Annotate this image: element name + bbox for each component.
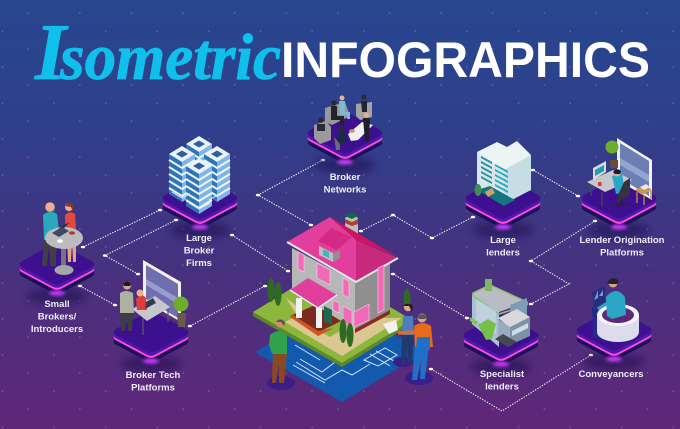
trees bbox=[268, 278, 410, 347]
panel: conveyancers bbox=[577, 278, 651, 380]
central illustration: house on blueprint bbox=[253, 212, 433, 402]
icon: mid-rise buildings bbox=[470, 279, 530, 347]
panel: broker networks bbox=[308, 94, 382, 196]
platform bbox=[114, 312, 188, 373]
platform bbox=[466, 178, 540, 239]
icon: server racks bbox=[169, 136, 230, 214]
label: Broker bbox=[184, 246, 215, 256]
icon: two people at table bbox=[42, 202, 83, 275]
platform bbox=[163, 178, 237, 239]
icon: person at cylinder desk bbox=[592, 278, 639, 342]
platform bbox=[308, 112, 382, 174]
label: Brokers/ bbox=[38, 312, 77, 322]
platform bbox=[20, 244, 94, 305]
person: woman with plan bbox=[383, 303, 414, 367]
title bbox=[34, 9, 650, 97]
label: Lender Origination bbox=[580, 235, 665, 246]
panel: lender origination platforms bbox=[580, 138, 665, 258]
icon: meeting room bbox=[314, 94, 373, 150]
icon: lender workstation bbox=[587, 138, 652, 207]
panel: small brokers bbox=[20, 202, 94, 335]
label: lenders bbox=[485, 382, 519, 392]
platform bbox=[577, 310, 651, 371]
title word: INFOGRAPHICS: INFOGRAPHICS bbox=[281, 32, 650, 88]
label: Firms bbox=[186, 258, 212, 269]
porch bbox=[290, 278, 341, 336]
panel: large broker firms bbox=[163, 136, 237, 269]
label: Small bbox=[44, 299, 70, 310]
panel: broker tech platforms bbox=[114, 260, 188, 394]
icon: office workstation bbox=[120, 260, 188, 335]
label: Specialist bbox=[480, 369, 525, 380]
dormer bbox=[318, 228, 352, 262]
title script word: Isometric: I bbox=[34, 9, 69, 97]
label: Introducers bbox=[31, 324, 83, 335]
platform bbox=[464, 314, 538, 376]
blueprint bbox=[255, 303, 425, 402]
label: Large bbox=[490, 235, 516, 246]
label: Platforms bbox=[131, 382, 175, 394]
chimney bbox=[345, 212, 358, 234]
platform bbox=[582, 178, 656, 239]
label: Conveyancers bbox=[579, 369, 643, 380]
panel: large lenders bbox=[466, 141, 540, 258]
person: man in overalls bbox=[398, 314, 433, 385]
label: Networks bbox=[324, 184, 366, 196]
windows bbox=[298, 252, 384, 327]
label: Broker bbox=[330, 172, 361, 183]
label: Broker Tech bbox=[126, 370, 181, 381]
house bbox=[287, 212, 398, 336]
land bbox=[253, 268, 412, 367]
roof bbox=[287, 217, 398, 282]
label: lenders bbox=[486, 248, 520, 258]
title script word: Isometric: sometric bbox=[59, 21, 281, 94]
label: Platforms bbox=[600, 248, 644, 258]
label: Large bbox=[186, 233, 212, 244]
icon: office tower bbox=[474, 141, 531, 206]
person: man in green bbox=[267, 318, 295, 390]
panel: specialist lenders bbox=[464, 279, 538, 392]
dotted connector lines bbox=[78, 159, 597, 411]
